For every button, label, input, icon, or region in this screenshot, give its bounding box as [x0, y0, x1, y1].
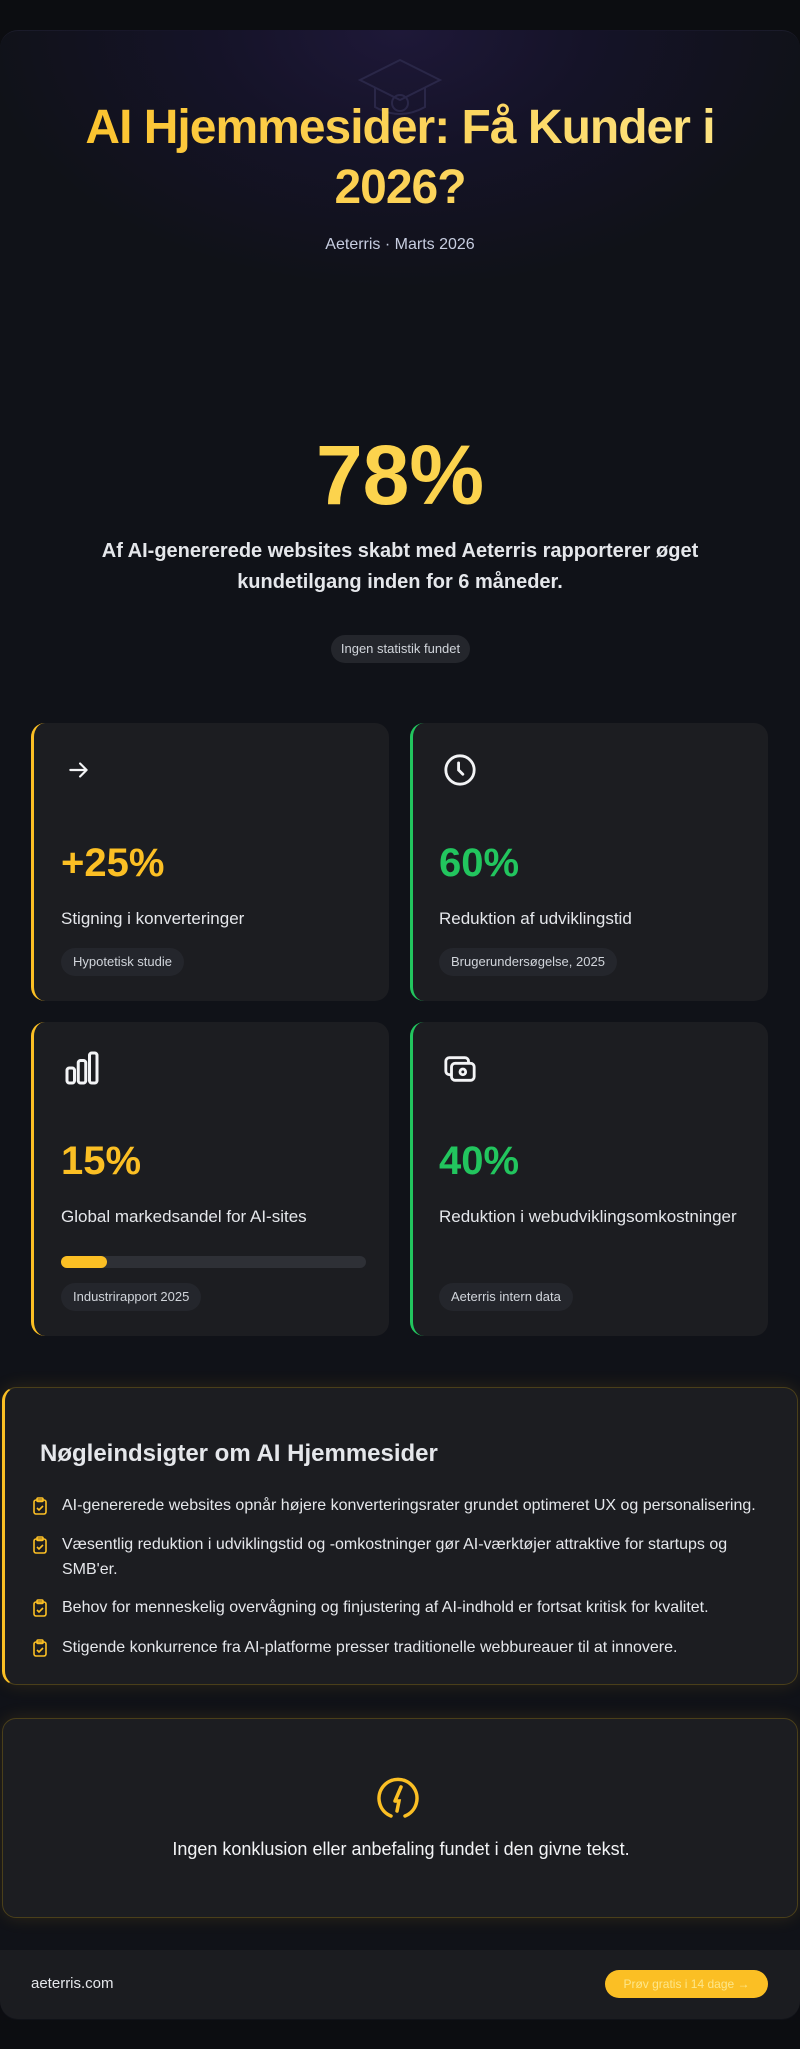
- title: AI Hjemmesider: Få Kunder i: [85, 101, 715, 154]
- icon: money: [444, 1056, 476, 1082]
- bullet list: [33, 1497, 756, 1657]
- label: Global markedsandel for AI-sites: [61, 1207, 307, 1226]
- icon: bar chart: [66, 1052, 98, 1084]
- CTA button: [605, 1970, 768, 1998]
- value: +25%: [61, 841, 164, 885]
- value: 40%: [439, 1139, 519, 1183]
- source: Aeterris intern data: [451, 1289, 561, 1304]
- bullet list: AI-genererede websites opnår højere konverteringsrater grundet optimeret UX og personalisering.: [62, 1497, 756, 1514]
- subtitle: Aeterris · Marts 2026: [325, 236, 475, 253]
- value: 60%: [439, 841, 519, 885]
- label: Reduktion af udviklingstid: [439, 909, 632, 928]
- panel: key insights: [2, 1387, 798, 1685]
- hero description: Af AI-genererede websites skabt med Aeterris rapporterer øget kundetilgang inden for 6 måneder.: [102, 540, 698, 593]
- label: Stigning i konverteringer: [61, 909, 244, 928]
- footer url: aeterris.com: [31, 1975, 114, 1992]
- bullet list: Stigende konkurrence fra AI-platforme presser traditionelle webbureauer til at innovere.: [62, 1639, 677, 1656]
- footer: [0, 1950, 800, 2019]
- title: 2026?: [334, 161, 466, 214]
- CTA button: Prøv gratis i 14 dage →: [623, 1977, 750, 1991]
- panel: conclusion: [2, 1718, 798, 1918]
- value: 15%: [61, 1139, 141, 1183]
- hero stat: 78%: [316, 428, 484, 522]
- title: [0, 98, 800, 218]
- card: cost: [410, 1022, 768, 1336]
- progress bar: [61, 1256, 366, 1268]
- bullet list: Behov for menneskelig overvågning og finjustering af AI-indhold er fortsat kritisk for kvalitet.: [62, 1599, 709, 1616]
- icon: conclusion: [377, 1778, 419, 1818]
- icon: clock: [444, 754, 476, 786]
- icon: faint graduation cap: [358, 59, 442, 115]
- conclusion text: Ingen konklusion eller anbefaling fundet i den givne tekst.: [172, 1839, 630, 1859]
- source: Hypotetisk studie: [73, 954, 172, 969]
- card: conversions: [31, 723, 389, 1001]
- source: Brugerundersøgelse, 2025: [451, 954, 605, 969]
- card: dev time: [410, 723, 768, 1001]
- label: Reduktion i webudviklingsomkostninger: [439, 1207, 737, 1226]
- source: Industrirapport 2025: [73, 1289, 189, 1304]
- card: market share: [31, 1022, 389, 1336]
- heading: insights: Nøgleindsigter om AI Hjemmesider: [40, 1440, 438, 1467]
- icon: arrow: [69, 762, 88, 778]
- hero source pill: Ingen statistik fundet: [341, 641, 460, 656]
- bullet list: Væsentlig reduktion i udviklingstid og -omkostninger gør AI-værktøjer attraktive for startups og SMB'er.: [62, 1536, 727, 1578]
